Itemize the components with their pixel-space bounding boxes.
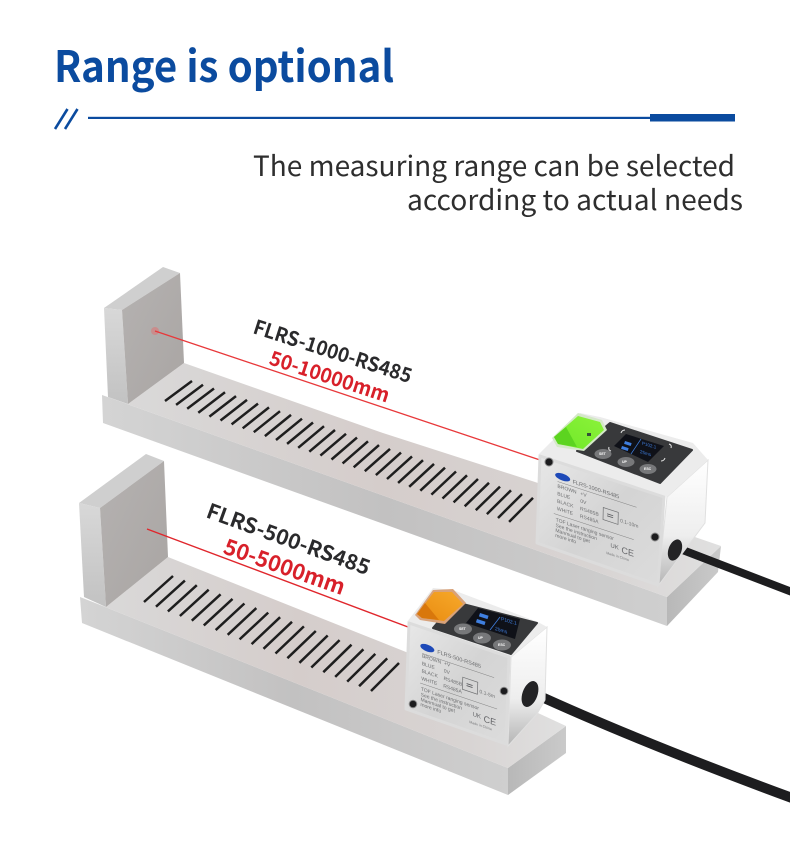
sensor: FLRS-1000 — [537, 413, 708, 586]
control panel: 25ms — [495, 626, 508, 636]
control panel: UP — [622, 460, 628, 464]
sensor label: more info — [420, 702, 441, 715]
sensor: FLRS-500 — [406, 588, 547, 746]
green cover — [552, 413, 607, 451]
target wall — [104, 267, 184, 404]
sensor label: more info — [555, 533, 576, 545]
sensor label: RS485B — [443, 676, 463, 688]
sensor label: CE — [621, 545, 634, 559]
sensor label: See the instruction — [555, 523, 597, 542]
sensor label — [418, 642, 498, 733]
rail base — [102, 363, 721, 626]
label: FLRS-500-RS485: FLRS-500-RS485 — [203, 495, 375, 582]
sensor label — [553, 471, 639, 565]
sensor label: RS485A — [443, 683, 462, 696]
control panel — [577, 423, 692, 483]
ventilation slots — [144, 576, 399, 691]
control panel — [433, 602, 537, 654]
sensor label: 0.1-10m — [620, 518, 638, 530]
sensor body — [406, 588, 547, 746]
title: Range is optional — [54, 33, 394, 95]
control panel: ESC — [498, 643, 506, 647]
cable: FLRS-1000 — [680, 549, 790, 592]
label: 50-10000mm: 50-10000mm — [266, 342, 394, 408]
label: 50-5000mm: 50-5000mm — [220, 529, 350, 602]
rail: FLRS-500 test bench — [79, 454, 566, 795]
sensor label: 0V — [580, 499, 587, 507]
sensor label: TOF Laser ranging sensor — [556, 517, 614, 542]
cable gland — [665, 537, 685, 563]
subtitle text — [253, 145, 743, 219]
sensor label: 0V — [444, 668, 451, 676]
sensor label: CE — [483, 714, 496, 728]
sensor label: FLRS-500-RS485 — [437, 650, 481, 670]
sensor label: Manmual to get — [420, 697, 456, 715]
cable gland — [518, 679, 542, 709]
sensor label: UK — [473, 711, 482, 721]
laser beam: FLRS-1000 — [151, 327, 540, 460]
ventilation slots — [165, 381, 533, 522]
control panel: 25ms — [640, 449, 652, 457]
control panel: SET — [459, 627, 467, 631]
sensor label: BLUE — [422, 661, 435, 671]
cable: FLRS-500 — [533, 693, 790, 798]
sensor label: BROWN — [422, 654, 442, 666]
sensor label: BLUE — [557, 491, 571, 501]
target wall — [79, 454, 168, 607]
sensor label: Manmual to get — [555, 528, 590, 545]
control panel: UP — [478, 636, 484, 640]
sensor label: RS485A — [580, 514, 599, 526]
sensor label: +V — [444, 661, 451, 669]
sensor label: Made in China — [469, 720, 492, 731]
subtitle text: according to actual needs — [407, 179, 743, 219]
sensor label: BLACK — [557, 499, 574, 510]
mounting screws — [545, 458, 659, 541]
sensor label: WHITE — [557, 506, 574, 517]
sensor label: +V — [580, 491, 587, 499]
sensor label: TOF Laser ranging sensor — [421, 687, 479, 712]
sensor label: RS485B — [580, 506, 599, 518]
control panel: ESC — [644, 467, 652, 471]
sensor body — [537, 413, 708, 586]
header divider — [55, 109, 735, 129]
sensor label: BROWN — [557, 484, 577, 496]
mounting screws — [409, 687, 508, 708]
sensor label: UK — [610, 542, 620, 552]
sensor label: BLACK — [421, 669, 439, 680]
sensor label: 0.1-5m — [479, 689, 495, 700]
rail: FLRS-1000 test bench — [102, 267, 721, 626]
control panel: SET — [599, 452, 607, 456]
control panel: P102.1 — [642, 441, 657, 450]
sensor label: See the instruction — [421, 692, 462, 712]
subtitle text: The measuring range can be selected — [253, 145, 735, 185]
sensor label: WHITE — [421, 676, 438, 687]
sensor label: FLRS-1000-RS485 — [573, 480, 619, 501]
control panel: P102.1 — [501, 616, 517, 627]
laser beam: FLRS-500 — [147, 529, 408, 627]
rail base — [80, 557, 566, 795]
label: FLRS-1000-RS485: FLRS-1000-RS485 — [250, 311, 416, 389]
orange cover — [415, 589, 466, 624]
sensor label: Made in China — [606, 551, 629, 562]
